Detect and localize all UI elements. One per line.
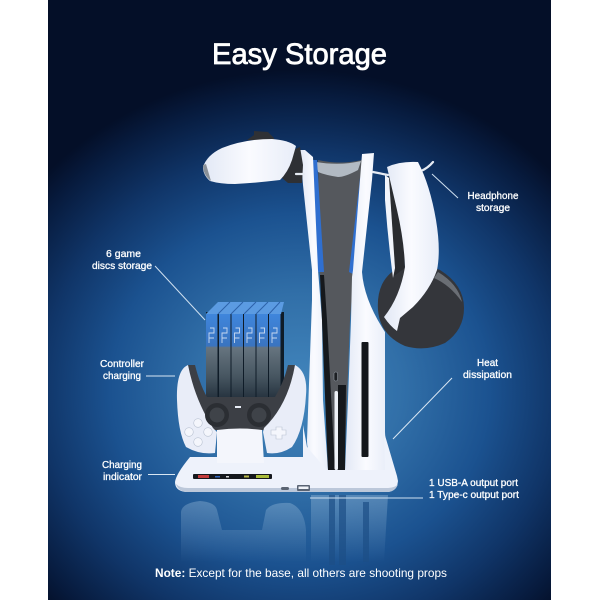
side heat slot bbox=[362, 342, 368, 457]
inner band bbox=[386, 172, 405, 276]
label: 6 game discs storage bbox=[92, 248, 152, 272]
cable slot bbox=[334, 391, 338, 470]
leader: ports bbox=[310, 497, 423, 499]
leader: indicator bbox=[148, 474, 175, 476]
label: heat dissipation: dissipation bbox=[463, 369, 512, 381]
charging dock bbox=[217, 428, 264, 463]
label: headphone storage: storage bbox=[476, 202, 510, 214]
earcup bbox=[378, 265, 464, 348]
thumbstick bbox=[247, 131, 274, 141]
note: Note: Except for the base, all others are shooting props bbox=[155, 566, 447, 580]
grip joint bbox=[282, 147, 303, 183]
base bbox=[175, 425, 398, 492]
hanging controller bbox=[203, 131, 303, 184]
leader: discs bbox=[155, 266, 205, 320]
grip bbox=[203, 139, 296, 184]
label: 6 game discs storage: discs storage bbox=[92, 260, 152, 272]
label: charging indicator: Charging bbox=[102, 459, 142, 471]
game discs bbox=[206, 302, 284, 398]
leader: headphone bbox=[432, 174, 458, 198]
leader: heat bbox=[393, 378, 452, 439]
c port bbox=[334, 372, 338, 381]
hook bars bbox=[296, 162, 433, 175]
label: ports: 1 Type-c output port bbox=[429, 489, 519, 501]
label: controller charging: Controller bbox=[100, 358, 144, 370]
tower left blue strip bbox=[313, 160, 324, 272]
headband bbox=[384, 162, 439, 331]
tower left white arm bbox=[300, 150, 328, 470]
label: 6 game discs storage: 6 game bbox=[106, 248, 141, 260]
tower right white arm and body bbox=[345, 153, 387, 470]
label: ports: 1 USB-A output port bbox=[429, 477, 518, 489]
light bar bbox=[235, 406, 241, 408]
tower upper highlight bbox=[316, 161, 361, 177]
reflection under base bbox=[181, 495, 388, 565]
label: heat dissipation bbox=[463, 357, 512, 381]
label: charging indicator bbox=[102, 459, 142, 483]
label: ports bbox=[429, 477, 519, 501]
face buttons bbox=[185, 419, 212, 446]
leader: controller bbox=[146, 375, 175, 377]
label: charging indicator: indicator bbox=[103, 471, 142, 483]
tower centre panel bbox=[318, 160, 362, 470]
label: controller charging: charging bbox=[103, 370, 141, 382]
controller on dock bbox=[177, 365, 306, 453]
usb ports bbox=[281, 485, 310, 491]
label: headphone storage bbox=[468, 190, 519, 214]
tower stand bbox=[300, 150, 387, 470]
label: controller charging bbox=[100, 358, 144, 382]
headphones bbox=[378, 162, 464, 348]
title: Easy Storage bbox=[212, 38, 387, 71]
grip tip bbox=[203, 164, 211, 181]
black left slit bbox=[320, 275, 335, 470]
label: headphone storage: Headphone bbox=[468, 190, 519, 202]
charging indicator strip bbox=[193, 474, 272, 479]
tower right blue strip bbox=[349, 175, 364, 275]
controller dark body bbox=[188, 365, 295, 430]
thumbsticks bbox=[205, 403, 229, 427]
disc case tops bbox=[206, 302, 284, 314]
label: heat dissipation: Heat bbox=[477, 357, 498, 369]
d-pad bbox=[271, 427, 286, 439]
logos bbox=[209, 328, 277, 343]
left grip bbox=[177, 365, 217, 453]
black right slit bbox=[338, 385, 346, 470]
right grip bbox=[263, 365, 306, 453]
disc backing bbox=[206, 312, 284, 398]
